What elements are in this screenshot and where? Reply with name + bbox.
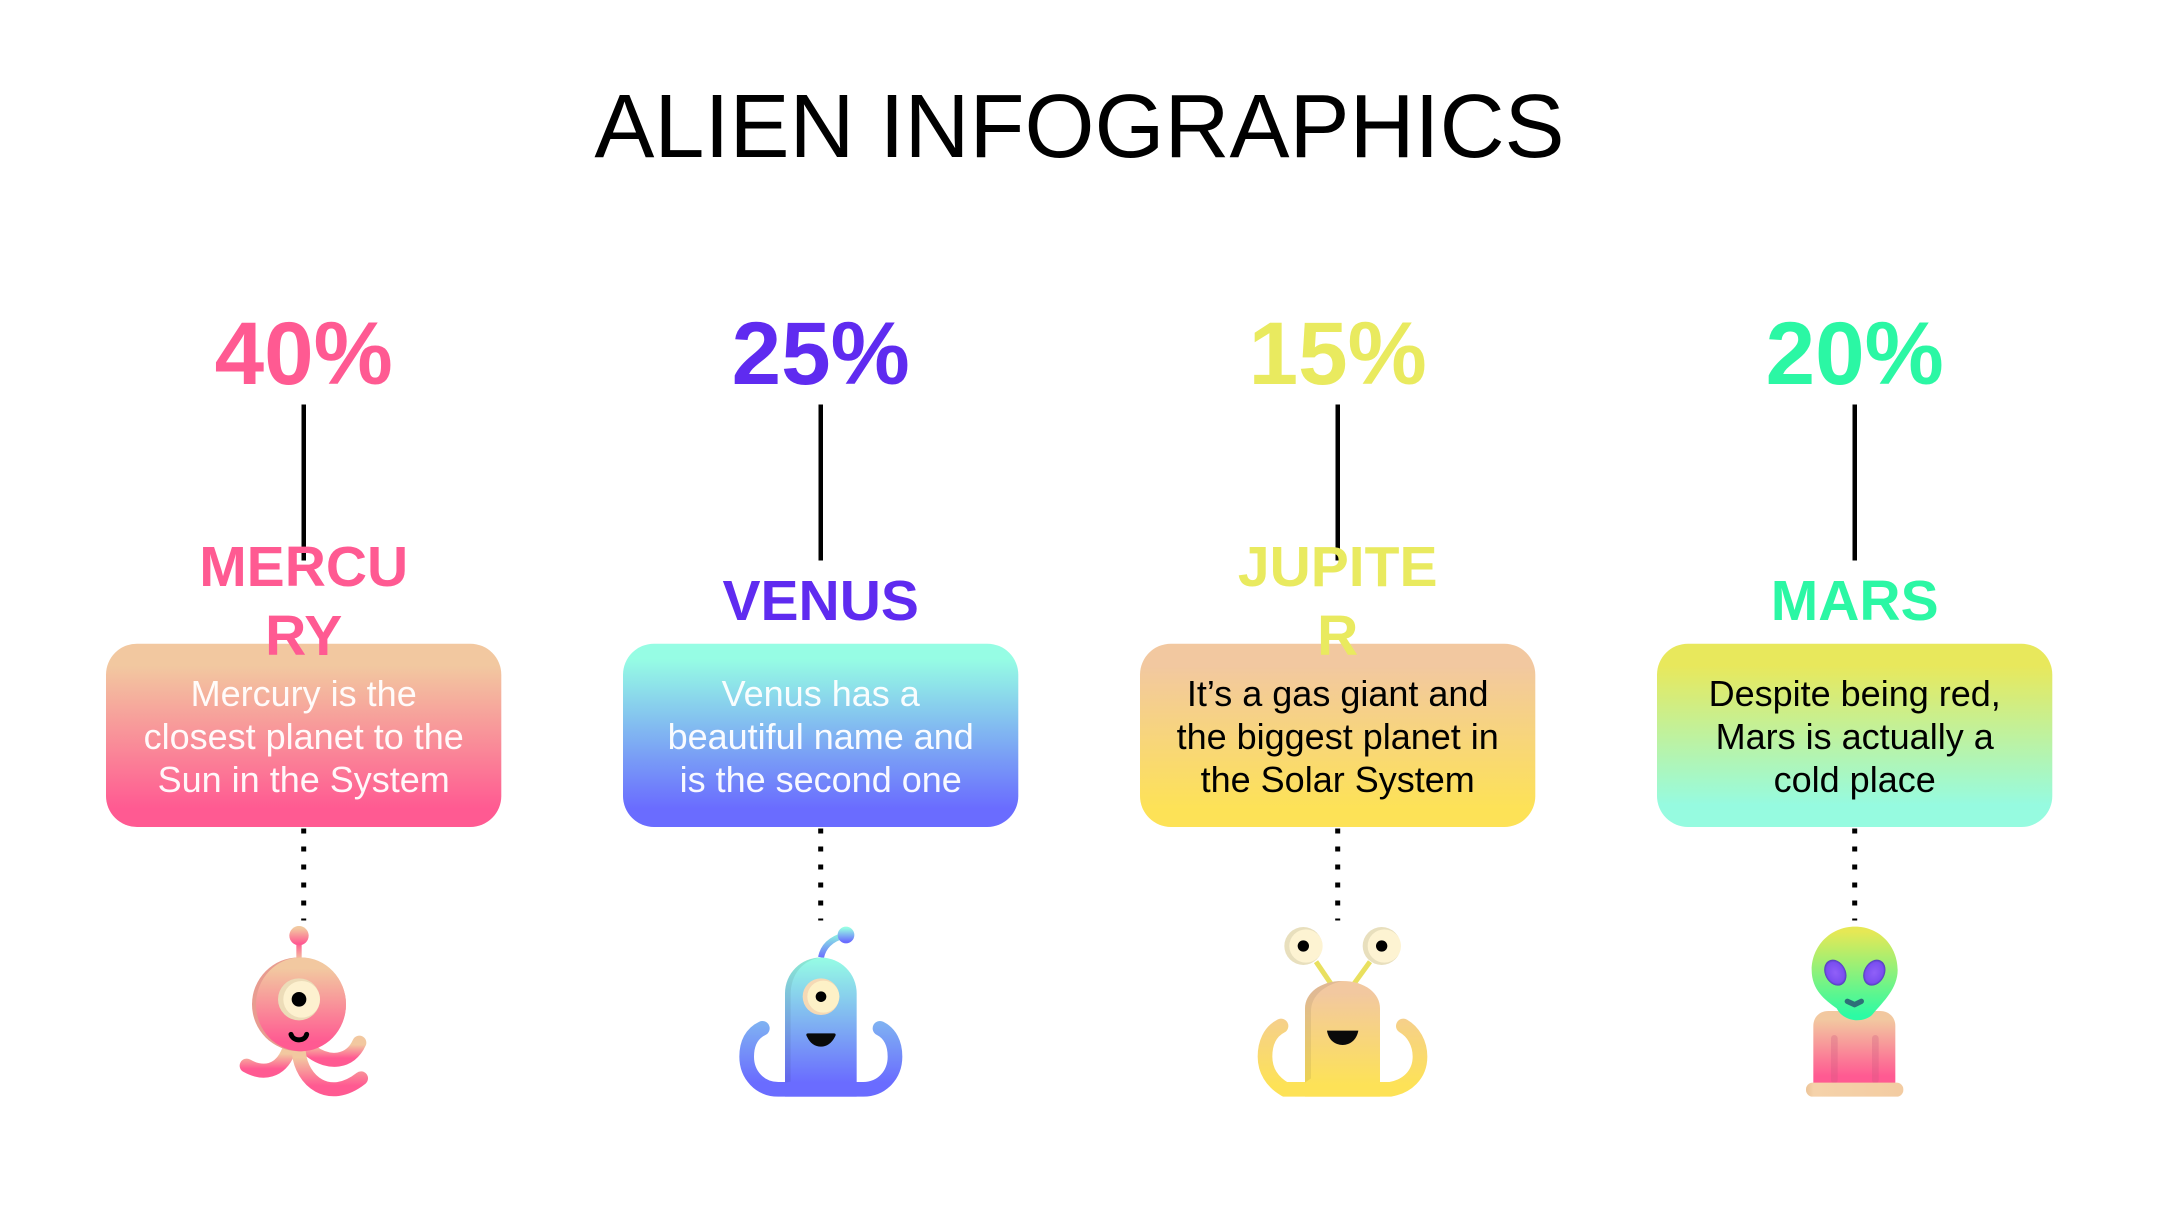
planet name: MERCU bbox=[199, 535, 408, 599]
percentage: 15%: 15% bbox=[1249, 303, 1427, 403]
dotted connector bbox=[1852, 828, 1857, 920]
panel: Jupiter column bbox=[1140, 303, 1535, 1097]
title: ALIEN INFOGRAPHICS bbox=[594, 77, 1565, 177]
description: the Solar System bbox=[1201, 759, 1475, 800]
text box bbox=[106, 644, 501, 827]
planet name: JUPITE bbox=[1238, 535, 1437, 599]
icon: pink one-eyed octopus alien bbox=[247, 926, 361, 1089]
percentage: 25%: 25% bbox=[732, 303, 910, 403]
connector line bbox=[302, 404, 306, 560]
text box bbox=[623, 644, 1018, 827]
description: is the second one bbox=[680, 759, 962, 800]
percentage: 20%: 20% bbox=[1766, 303, 1944, 403]
dotted connector bbox=[1335, 828, 1340, 920]
description: Mars is actually a bbox=[1716, 716, 1995, 757]
description: It’s a gas giant and bbox=[1187, 673, 1488, 714]
panel: Venus column bbox=[623, 303, 1018, 1097]
percentage: 40%: 40% bbox=[215, 303, 393, 403]
icon: blue one-eyed alien bbox=[747, 927, 895, 1097]
connector line bbox=[1336, 404, 1340, 560]
connector line bbox=[818, 404, 823, 560]
icon: yellow snail-eyed alien bbox=[1265, 927, 1420, 1097]
dotted connector bbox=[301, 828, 306, 920]
text box bbox=[1140, 644, 1535, 827]
panel: Mars column bbox=[1657, 303, 2052, 1097]
connector line bbox=[1852, 404, 1857, 560]
description: Despite being red, bbox=[1709, 673, 2001, 714]
planet name: MARS bbox=[1771, 569, 1939, 633]
planet name: VENUS bbox=[723, 569, 919, 633]
description: the biggest planet in bbox=[1177, 716, 1499, 757]
planet name: RY bbox=[265, 604, 342, 668]
description: closest planet to the bbox=[144, 716, 464, 757]
description: Venus has a bbox=[722, 673, 921, 714]
text box bbox=[1657, 644, 2052, 827]
dotted connector bbox=[818, 828, 823, 920]
description: Sun in the System bbox=[158, 759, 450, 800]
description: beautiful name and bbox=[668, 716, 974, 757]
icon: green grey-type alien bbox=[1806, 927, 1903, 1097]
description: cold place bbox=[1774, 759, 1936, 800]
panel: Mercury column bbox=[106, 303, 501, 1089]
planet name: R bbox=[1317, 604, 1358, 668]
description: Mercury is the bbox=[191, 673, 417, 714]
